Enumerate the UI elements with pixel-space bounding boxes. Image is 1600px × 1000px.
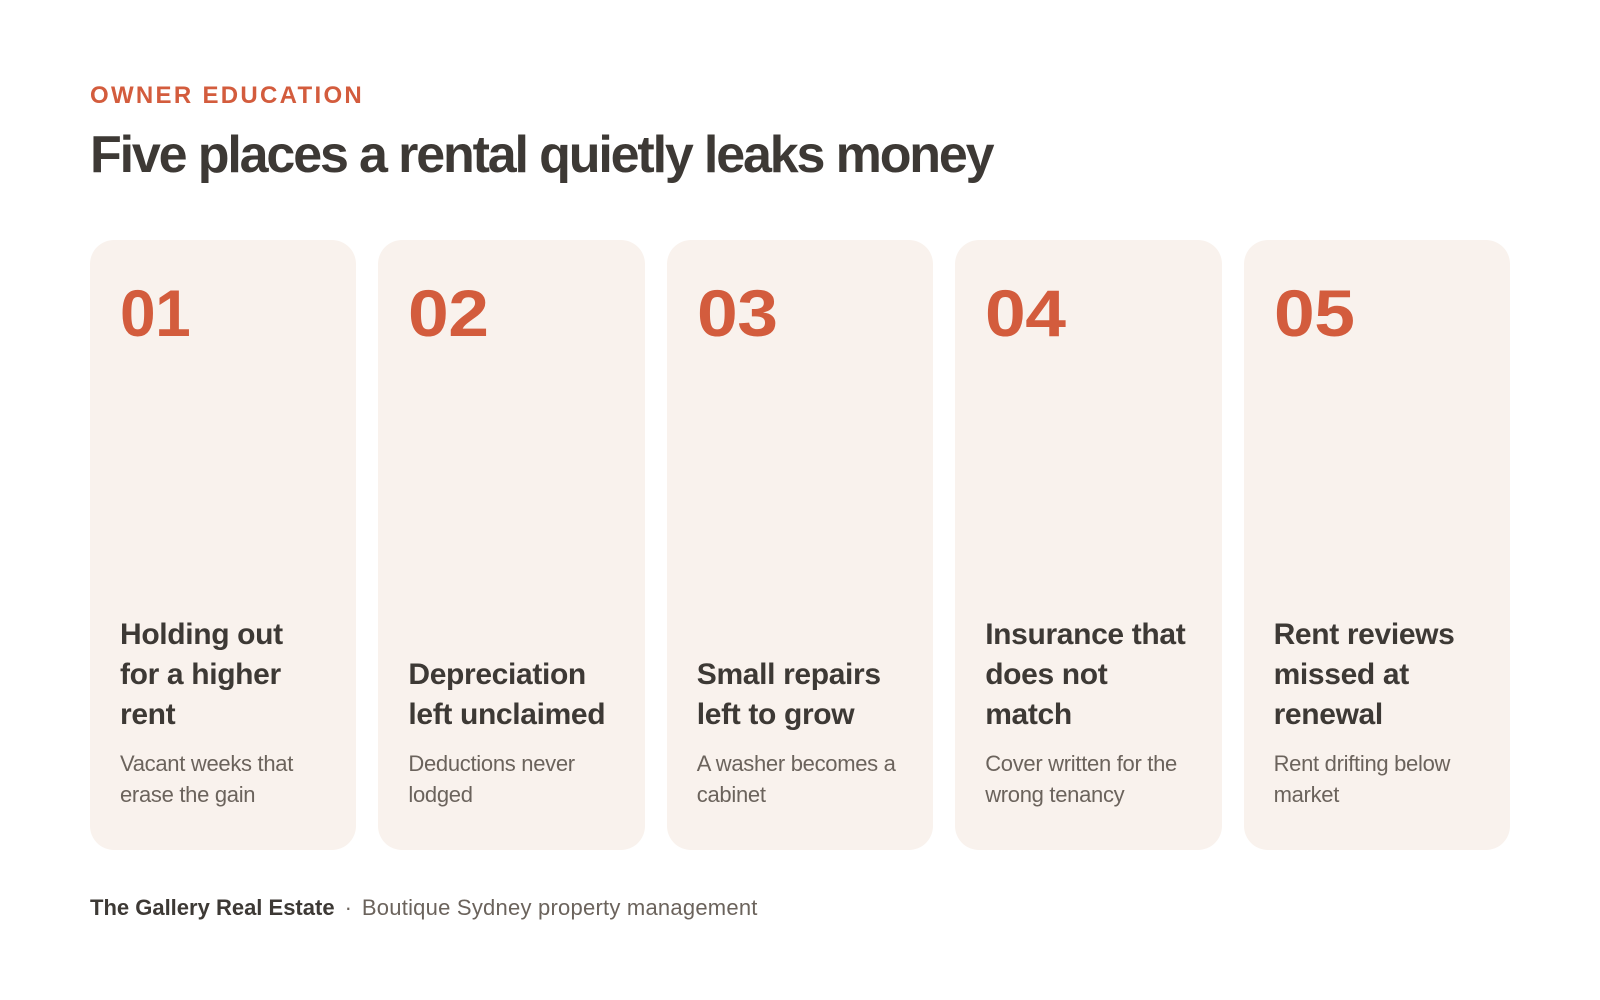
description 02 bbox=[408, 751, 575, 807]
description 03 bbox=[696, 751, 896, 807]
heading 01: rent bbox=[120, 698, 175, 731]
description 05 bbox=[1274, 751, 1450, 807]
footer: The Gallery Real Estate · Boutique Sydney property management bbox=[90, 895, 758, 920]
description 05: market bbox=[1274, 782, 1339, 807]
heading 04: does not bbox=[985, 658, 1107, 691]
heading 04: match bbox=[985, 698, 1072, 731]
description 05: Rent drifting below bbox=[1274, 751, 1450, 776]
heading 04 bbox=[985, 618, 1186, 731]
number 03: 03 bbox=[697, 276, 777, 350]
description 03: A washer becomes a bbox=[697, 751, 896, 776]
heading 02: left unclaimed bbox=[408, 698, 605, 731]
panel: card 02 bbox=[378, 240, 645, 850]
number 05: 05 bbox=[1274, 276, 1354, 350]
heading 03: Small repairs bbox=[697, 658, 881, 691]
heading 04: Insurance that bbox=[985, 618, 1185, 651]
description 03: cabinet bbox=[697, 782, 766, 807]
panel: card 03 bbox=[667, 240, 933, 850]
panel: card 04 bbox=[955, 240, 1222, 850]
eyebrow: OWNER EDUCATION bbox=[90, 82, 364, 109]
description 01: Vacant weeks that bbox=[120, 751, 293, 776]
heading 05: Rent reviews bbox=[1274, 618, 1454, 651]
number 02: 02 bbox=[408, 276, 489, 350]
heading 02 bbox=[408, 658, 605, 731]
title: Five places a rental quietly leaks money bbox=[90, 126, 992, 184]
number 04: 04 bbox=[985, 276, 1066, 350]
heading 05 bbox=[1274, 618, 1454, 731]
heading 03: left to grow bbox=[697, 698, 854, 731]
heading 05: missed at bbox=[1274, 658, 1409, 691]
panel: card 01 bbox=[90, 240, 356, 850]
description 04: Cover written for the bbox=[985, 751, 1177, 776]
heading 02: Depreciation bbox=[408, 658, 586, 691]
description 04 bbox=[985, 751, 1177, 807]
heading 05: renewal bbox=[1274, 698, 1383, 731]
heading 01: Holding out bbox=[120, 618, 283, 651]
description 01: erase the gain bbox=[120, 782, 255, 807]
heading 01 bbox=[120, 618, 283, 731]
heading 01: for a higher bbox=[120, 658, 281, 691]
panel: card 05 bbox=[1244, 240, 1510, 850]
description 01 bbox=[120, 751, 294, 807]
description 04: wrong tenancy bbox=[985, 782, 1124, 807]
description 02: lodged bbox=[408, 782, 473, 807]
description 02: Deductions never bbox=[408, 751, 575, 776]
number 01: 01 bbox=[120, 276, 190, 350]
heading 03 bbox=[697, 658, 881, 731]
